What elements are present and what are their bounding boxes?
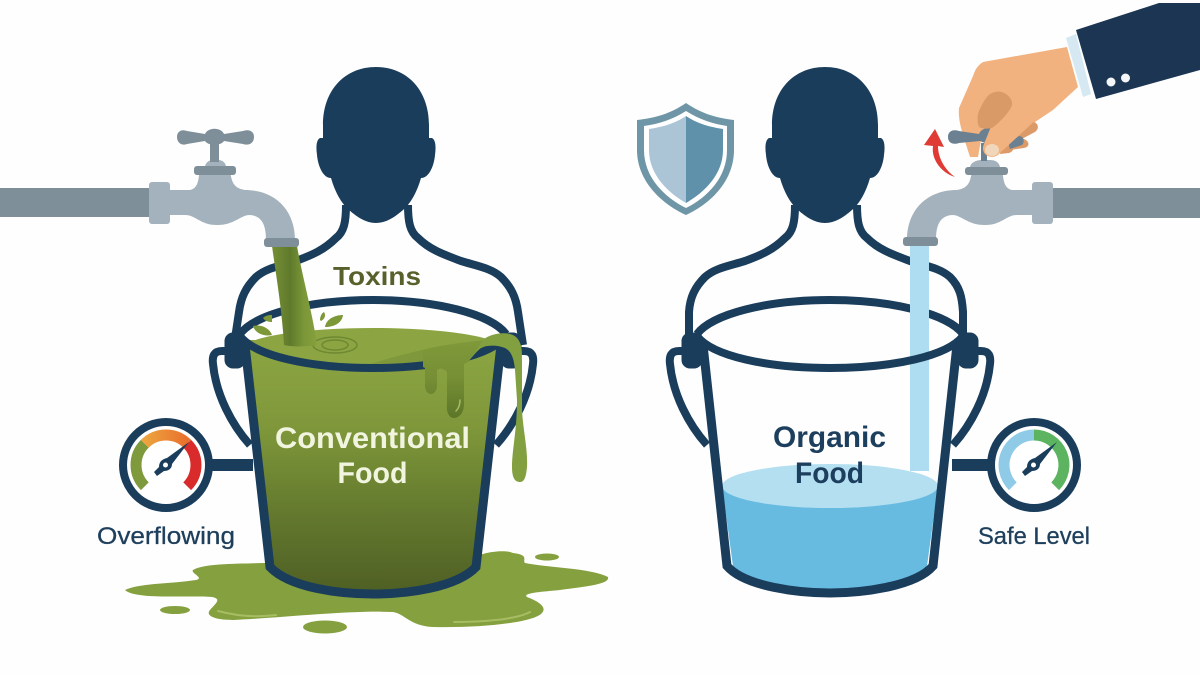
gauge: overflowing [123, 422, 253, 508]
water stream [910, 246, 929, 471]
label: food: Food [795, 457, 864, 490]
bucket handles [670, 351, 990, 445]
back fingers [1000, 120, 1038, 154]
faucet right [903, 160, 1200, 246]
toxic puddle [125, 551, 608, 634]
right panel: organic food [637, 3, 1200, 593]
bucket handles [213, 351, 533, 445]
faucet left [0, 129, 299, 247]
thumb [983, 112, 1040, 157]
bucket rim front and walls [686, 336, 974, 593]
label: conventional food: Conventional [275, 422, 470, 455]
bucket liquid [245, 328, 505, 593]
tap handle under the thumb [948, 128, 1024, 161]
splashes [253, 312, 343, 336]
label: toxins: Toxins [333, 261, 421, 291]
bucket rim back [240, 300, 506, 334]
person silhouette [689, 67, 963, 345]
toxic stream [272, 246, 317, 346]
label: food: Food [338, 457, 408, 490]
palm shadow [978, 92, 1012, 129]
bucket rim back [697, 300, 963, 334]
hand turning the tap [948, 3, 1200, 161]
label: safe level: Safe Level [978, 523, 1090, 550]
drips over the rim [423, 333, 527, 482]
label: overflowing: Overflowing [97, 523, 235, 550]
shield icon [637, 103, 734, 215]
left panel: conventional food [0, 67, 608, 634]
bucket rim front and walls [229, 336, 517, 594]
person silhouette [234, 67, 523, 345]
gauge: safe level [952, 422, 1077, 508]
bucket water [722, 464, 938, 589]
label: organic: Organic [773, 421, 886, 454]
red arrow [924, 129, 955, 177]
